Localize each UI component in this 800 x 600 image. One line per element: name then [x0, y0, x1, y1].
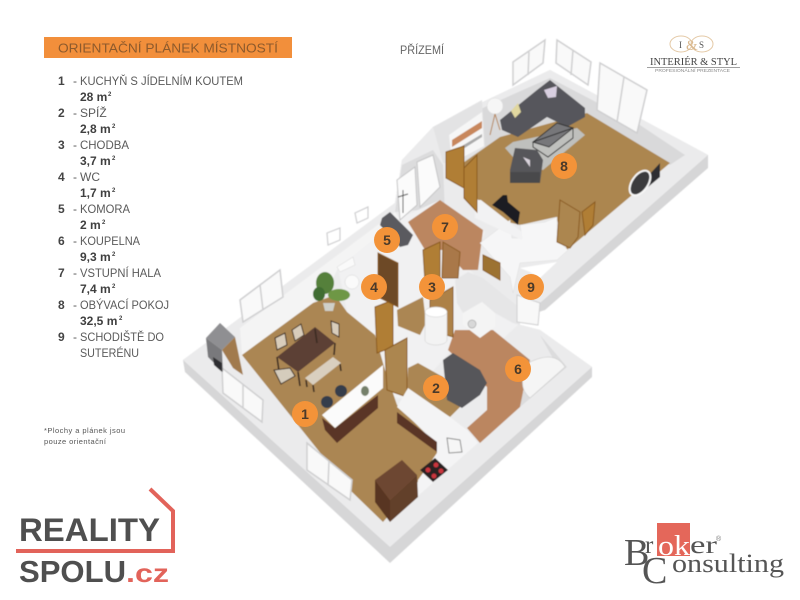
- room legend: 1,7 m: [80, 186, 111, 200]
- room legend: SCHODIŠTĚ DO: [80, 329, 164, 344]
- plant: [313, 272, 350, 311]
- dark shelving in pantry: [443, 353, 487, 408]
- armchair: [510, 148, 543, 183]
- toilet and basin: [337, 257, 359, 289]
- badge 2: 2: [432, 380, 440, 396]
- dining table with chairs: [274, 321, 339, 386]
- room legend: 2: [112, 188, 116, 194]
- room legend: 2: [58, 106, 65, 120]
- badge 1: [292, 401, 318, 427]
- room legend: 2: [119, 316, 123, 322]
- room legend: 9,3 m: [80, 250, 111, 264]
- badge 3: [419, 274, 445, 300]
- dining room back wall: [240, 212, 402, 355]
- logo: Reality Spolu: .cz: [126, 558, 169, 588]
- room legend: 2: [108, 92, 112, 98]
- badge 6: 6: [514, 361, 522, 377]
- coat stand: [398, 190, 408, 213]
- logo: Broker Consulting: [624, 523, 784, 592]
- wood floor: corridor: [397, 297, 426, 335]
- room legend: 2: [102, 220, 106, 226]
- room legend: 9: [58, 330, 65, 344]
- badge 5: 5: [383, 232, 391, 248]
- wall band to the side door: [455, 272, 520, 325]
- footnote: [44, 426, 125, 446]
- footnote: pouze orientační: [44, 437, 107, 446]
- fridge: [206, 323, 243, 375]
- room legend: SUTERÉNU: [80, 345, 139, 360]
- room legend: 32,5 m: [80, 314, 117, 328]
- cooktop: [420, 458, 448, 482]
- living room back walls: [440, 78, 685, 165]
- logo: Interiér & Styl: &: [686, 38, 698, 54]
- black fireplace: [492, 195, 520, 225]
- badge 5: [374, 227, 400, 253]
- logo: Broker Consulting: r: [645, 532, 654, 559]
- living room rug: [505, 128, 585, 170]
- logo: Broker Consulting: ok: [658, 531, 690, 562]
- badge 3: 3: [428, 279, 436, 295]
- logo: Broker Consulting: er: [690, 532, 718, 559]
- badge 9: 9: [527, 279, 535, 295]
- room legend: -: [73, 330, 77, 344]
- washing machine: [463, 302, 495, 338]
- room legend: 2: [112, 124, 116, 130]
- room legend: 6: [58, 234, 65, 248]
- entry wall: [395, 150, 445, 215]
- room legend: 4: [58, 170, 65, 184]
- central walls base: [338, 200, 520, 400]
- badge 9: [518, 274, 544, 300]
- room legend: 5: [58, 202, 65, 216]
- windows: [222, 40, 647, 500]
- room legend: 2: [112, 156, 116, 162]
- room legend: 7: [58, 266, 65, 280]
- tile floor: entrance hall: [408, 200, 483, 270]
- wall mirror: [625, 163, 660, 199]
- coffee table: [533, 123, 573, 157]
- room legend: 2: [112, 252, 116, 258]
- room legend: VSTUPNÍ HALA: [80, 265, 161, 280]
- room legend: -: [73, 202, 77, 216]
- logo: Reality Spolu: REALITY: [19, 512, 160, 548]
- room legend: 8: [58, 298, 65, 312]
- room legend: -: [73, 138, 77, 152]
- logo: Interiér & Styl: S: [699, 40, 704, 50]
- staircase: [480, 217, 568, 293]
- logo: Reality Spolu: SPOLU: [19, 554, 126, 589]
- wood floor: pantry: [407, 363, 460, 417]
- bar stools: [321, 385, 347, 408]
- wooden doors: [375, 146, 595, 397]
- front door and window opening: [397, 155, 440, 220]
- inner wall shading: bathroom wing: [520, 335, 567, 407]
- stair opening: [520, 262, 557, 278]
- room legend: WC: [80, 170, 100, 184]
- outer walls: [183, 70, 708, 563]
- room badges: [292, 153, 577, 427]
- footnote: *Plochy a plánek jsou: [44, 426, 125, 435]
- room legend: -: [73, 170, 77, 184]
- room legend: -: [73, 74, 77, 88]
- side door: [517, 295, 540, 325]
- bathtub: [522, 357, 565, 398]
- dark shelving in storeroom: [380, 212, 413, 247]
- bench: [305, 357, 341, 392]
- badge 4: [361, 274, 387, 300]
- room legend: 2: [112, 284, 116, 290]
- logo: Interiér & Styl: PROFESIONÁLNÍ PREZENTACE: [655, 67, 730, 73]
- floor plan: [183, 40, 708, 563]
- bookshelf: [433, 100, 485, 163]
- room legend: OBÝVACÍ POKOJ: [80, 297, 169, 312]
- floor lamp: [487, 98, 503, 135]
- room legend: -: [73, 234, 77, 248]
- room legend: 2,8 m: [80, 122, 111, 136]
- room legend: CHODBA: [80, 138, 129, 152]
- floor heading: PŘÍZEMÍ: [400, 42, 445, 57]
- room legend: KOUPELNA: [80, 234, 140, 248]
- logo: Broker Consulting: C: [642, 550, 667, 592]
- logo: Interiér & Styl: INTERIÉR & STYL: [650, 56, 737, 68]
- badge 8: [551, 153, 577, 179]
- kitchen island: [322, 365, 383, 443]
- room legend: 3,7 m: [80, 154, 111, 168]
- room legend: 28 m: [80, 90, 107, 104]
- tall kitchen cabinet: [375, 460, 418, 522]
- badge 1: 1: [301, 406, 309, 422]
- logo: Reality Spolu: [16, 489, 173, 589]
- room legend: -: [73, 298, 77, 312]
- badge 2: [423, 375, 449, 401]
- wood floor: dining and kitchen: [242, 295, 437, 522]
- boiler cylinder: [425, 307, 447, 345]
- badge 8: 8: [560, 158, 568, 174]
- tile floor: bathroom: [448, 330, 530, 443]
- room legend: [58, 73, 243, 360]
- room legend: 7,4 m: [80, 282, 111, 296]
- title banner: ORIENTAČNÍ PLÁNEK MÍSTNOSTÍ: [58, 40, 278, 56]
- room legend: KUCHYŇ S JÍDELNÍM KOUTEM: [80, 73, 243, 88]
- badge 7: [432, 214, 458, 240]
- logo: Broker Consulting: onsulting: [672, 549, 784, 578]
- room legend: 2 m: [80, 218, 101, 232]
- badge 4: 4: [370, 279, 378, 295]
- title banner: [44, 37, 292, 58]
- wall vents: [327, 207, 368, 245]
- room legend: KOMORA: [80, 202, 130, 216]
- room legend: SPÍŽ: [80, 105, 107, 120]
- room legend: 1: [58, 74, 65, 88]
- room legend: -: [73, 266, 77, 280]
- logo: Interiér & Styl: [647, 36, 740, 73]
- logo: Interiér & Styl: I: [679, 40, 682, 50]
- room legend: -: [73, 106, 77, 120]
- logo: Broker Consulting: B: [624, 532, 649, 574]
- sofa: [500, 80, 585, 137]
- logo: Broker Consulting: ®: [716, 535, 722, 543]
- badge 6: [505, 356, 531, 382]
- room legend: 3: [58, 138, 65, 152]
- badge 7: 7: [441, 219, 449, 235]
- wood floor: living room: [463, 113, 670, 250]
- kitchen counter: [397, 388, 478, 496]
- white partition at fireplace: [475, 200, 522, 240]
